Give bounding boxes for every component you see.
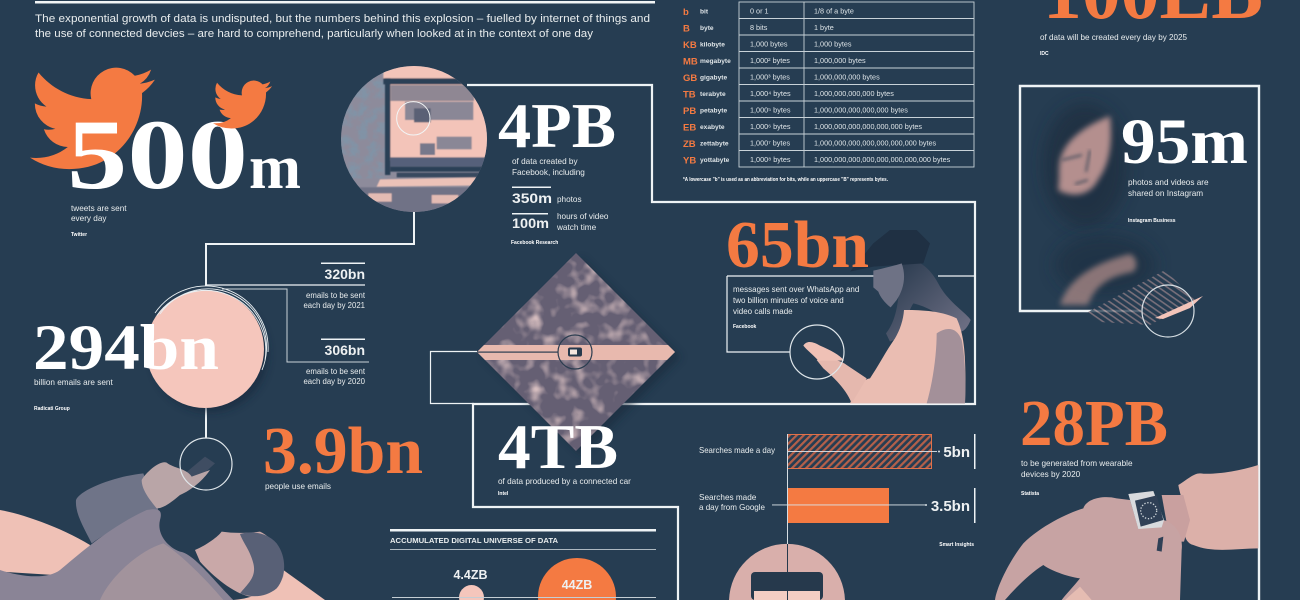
label: hours of video: hours of video — [557, 212, 609, 221]
icon: large twitter bird — [30, 68, 155, 169]
photo: hand with smartwatch — [995, 465, 1258, 600]
row: petabyte: PB — [683, 106, 696, 117]
row: petabyte: 1,000,000,000,000,000 bytes — [814, 106, 908, 114]
stat: wearables — [995, 387, 1258, 600]
solid bar: searches from Google — [787, 488, 889, 523]
value end ticks — [974, 434, 976, 523]
value: 5bn: 5bn — [943, 444, 970, 461]
row: yottabyte: 1,000,000,000,000,000,000,000,000 bytes — [814, 155, 951, 164]
3.9bn caption: people use emails — [265, 482, 331, 491]
number: 4TB: 4TB — [498, 412, 618, 482]
stat: emails by 2021 — [303, 262, 366, 310]
row: yottabyte: 1,000⁸ bytes — [750, 155, 791, 164]
small highlight circle — [397, 102, 430, 135]
320bn caption second line: each day by 2021 — [303, 301, 365, 310]
row: bit: 0 or 1 — [750, 6, 769, 16]
photo diamond: connected car on road — [477, 253, 681, 456]
row: kilobyte: 1,000 bytes — [814, 40, 852, 48]
value: 320bn: 320bn — [325, 266, 365, 282]
data unit table — [683, 2, 974, 183]
row: bit: b — [683, 7, 689, 18]
label: watch time: watch time — [556, 223, 597, 232]
row: megabyte: 1,000² bytes — [750, 56, 790, 65]
label: 4.4ZB: 4.4ZB — [453, 568, 488, 582]
row: megabyte: 1,000,000 bytes — [814, 56, 866, 65]
source: Intel: Intel — [498, 491, 509, 497]
row: gigabyte: 1,000,000,000 bytes — [814, 72, 880, 82]
row: gigabyte: gigabyte — [700, 74, 727, 82]
bubble: 4.4ZB — [459, 585, 484, 600]
source: Instagram Business: Instagram Business — [1128, 218, 1176, 224]
label: 44ZB: 44ZB — [562, 578, 592, 592]
value: 350m: 350m — [512, 190, 552, 206]
WhatsApp caption second line: two billion minutes of voice and — [733, 296, 844, 305]
label: photos: photos — [557, 195, 582, 204]
photo circle: phone with search — [729, 544, 845, 600]
source: Facebook: Facebook — [733, 324, 757, 330]
Instagram caption second line: shared on Instagram — [1128, 189, 1203, 198]
pink circle shadow — [152, 296, 268, 412]
row: byte: 8 bits — [750, 23, 768, 32]
row: kilobyte: kilobyte — [700, 42, 725, 48]
pink circle — [146, 290, 264, 408]
row: kilobyte — [683, 40, 852, 51]
row: bit: bit — [700, 8, 709, 16]
stat: emails by 2020 — [303, 338, 366, 386]
table footnote: *A lowercase "b" is used as an abbreviation for bits, while an uppercase "B" represents bytes. — [683, 177, 889, 183]
photo: woman lit by phone — [1043, 103, 1203, 325]
wearables caption second line: devices by 2020 — [1021, 470, 1081, 479]
row: yottabyte — [683, 155, 951, 166]
stat: 100EB — [1040, 0, 1263, 57]
row: zettabyte — [683, 138, 937, 150]
chart: searches per day — [699, 434, 976, 548]
number: 294bn: 294bn — [33, 312, 219, 384]
number: 4PB: 4PB — [498, 91, 616, 161]
row: zettabyte: zettabyte — [700, 140, 729, 148]
row: petabyte: petabyte — [700, 108, 727, 114]
tweets caption second line: every day — [71, 214, 107, 223]
bar label: searches made a day: Searches made a day — [699, 446, 776, 455]
row: yottabyte: yottabyte — [700, 157, 730, 164]
row: byte: 1 byte — [814, 23, 834, 32]
circle highlight — [1142, 285, 1194, 337]
wearables caption: to be generated from wearable — [1021, 459, 1133, 468]
stat: connected car — [498, 412, 631, 497]
car highlight circle — [558, 335, 592, 369]
row: byte: B — [683, 24, 690, 34]
WhatsApp caption third line: video calls made — [733, 307, 793, 316]
row: kilobyte: 1,000 bytes — [750, 40, 788, 48]
row: zettabyte: 1,000,000,000,000,000,000,000 bytes — [814, 138, 937, 148]
row: yottabyte: YB — [683, 156, 696, 166]
rule above 100m — [512, 213, 548, 214]
stat: Facebook 4PB — [498, 91, 616, 246]
stat: tweets — [30, 68, 301, 238]
rule above 306bn — [321, 338, 365, 340]
value: 3.5bn: 3.5bn — [931, 498, 970, 515]
row: gigabyte: 1,000³ bytes — [750, 72, 790, 82]
row: byte: byte — [700, 25, 714, 32]
circle highlight on phone — [180, 438, 232, 490]
circle highlight — [790, 325, 844, 379]
tweets caption: tweets are sent — [71, 204, 127, 213]
leader lines — [772, 450, 940, 506]
row: exabyte: EB — [683, 122, 696, 134]
row: zettabyte: ZB — [683, 139, 696, 150]
stat: people use emails — [263, 414, 423, 491]
row: exabyte: 1,000⁶ bytes — [750, 122, 791, 131]
Instagram caption: photos and videos are — [1128, 178, 1209, 187]
row: bit: 1/8 of a byte — [814, 6, 854, 16]
row: megabyte: megabyte — [700, 58, 731, 65]
100EB caption: of data will be created every day by 2025 — [1040, 33, 1187, 42]
source: Smart Insights: Smart Insights — [939, 542, 974, 548]
row: exabyte — [683, 122, 922, 134]
photo: man lying with phone — [0, 457, 325, 600]
row: megabyte — [683, 56, 866, 68]
row: petabyte — [683, 106, 908, 117]
source: Twitter: Twitter — [71, 232, 87, 238]
4TB caption: of data produced by a connected car — [498, 477, 631, 486]
chart: accumulated digital universe of data — [390, 529, 656, 600]
306bn caption second line: each day by 2020 — [303, 377, 366, 386]
number: 95m: 95m — [1121, 106, 1248, 178]
source: Facebook Research: Facebook Research — [511, 240, 558, 246]
row: kilobyte: KB — [683, 40, 697, 51]
row: exabyte: 1,000,000,000,000,000,000 bytes — [814, 122, 922, 131]
bar label: searches made: Searches made — [699, 493, 757, 502]
number: 28PB: 28PB — [1020, 387, 1168, 460]
306bn caption: emails to be sent — [306, 367, 366, 376]
row: terabyte: 1,000⁴ bytes — [750, 89, 791, 98]
heading rule — [390, 548, 656, 551]
photo: woman looking at phone — [803, 230, 971, 403]
number: 500: 500 — [67, 99, 248, 210]
320bn caption: emails to be sent — [306, 291, 366, 300]
row: petabyte: 1,000⁵ bytes — [750, 106, 791, 114]
connector lines — [206, 85, 1259, 600]
hatched bar: searches made a day — [788, 434, 932, 468]
4PB caption second line: Facebook, including — [512, 168, 585, 177]
value: 306bn: 306bn — [325, 342, 365, 358]
rule above 350m — [512, 186, 551, 188]
stat: Instagram — [1043, 103, 1248, 337]
bar label: a day from Google: a day from Google — [699, 503, 765, 512]
table grid — [739, 2, 974, 167]
chart top rule — [390, 529, 656, 532]
row: terabyte: TB — [683, 90, 696, 100]
number suffix: m: m — [249, 134, 301, 202]
intro text — [35, 1, 655, 40]
4PB caption: of data created by — [512, 157, 578, 166]
row: byte — [683, 23, 834, 34]
WhatsApp caption: messages sent over WhatsApp and — [733, 285, 859, 294]
row: terabyte — [683, 89, 894, 100]
row: megabyte: MB — [683, 56, 698, 68]
photo circle: laptop — [340, 65, 490, 217]
icon: small twitter bird — [213, 81, 272, 129]
row: terabyte: 1,000,000,000,000 bytes — [814, 89, 894, 98]
row: gigabyte: GB — [683, 73, 697, 84]
source: Statista: Statista — [1021, 491, 1039, 497]
number: 65bn: 65bn — [726, 208, 869, 282]
number: 3.9bn: 3.9bn — [263, 414, 423, 488]
intro text: The exponential growth of data is undisputed, but the numbers behind this explosion – fuelled by internet of things and — [35, 13, 650, 25]
row: terabyte: terabyte — [700, 91, 726, 98]
stat: WhatsApp — [726, 208, 971, 403]
chart axis — [392, 597, 656, 598]
row: zettabyte: 1,000⁷ bytes — [750, 138, 790, 148]
circle outlines — [155, 286, 268, 370]
row: gigabyte — [683, 72, 880, 84]
emails caption: billion emails are sent — [34, 378, 113, 387]
rule above 320bn — [321, 262, 365, 264]
stat: emails 294bn — [33, 286, 268, 412]
source: IDC: IDC — [1040, 51, 1049, 57]
intro text: the use of connected devcies – are hard to comprehend, particularly when looked at in the context of one day — [35, 28, 594, 40]
row: exabyte: exabyte — [700, 124, 725, 131]
vertical axis line — [787, 434, 788, 600]
row: bit — [683, 6, 854, 18]
source: Radicati Group: Radicati Group — [34, 406, 70, 412]
value: 100m: 100m — [512, 215, 549, 231]
bubble: 44ZB — [538, 558, 616, 600]
chart heading: ACCUMULATED DIGITAL UNIVERSE OF DATA — [390, 536, 559, 545]
